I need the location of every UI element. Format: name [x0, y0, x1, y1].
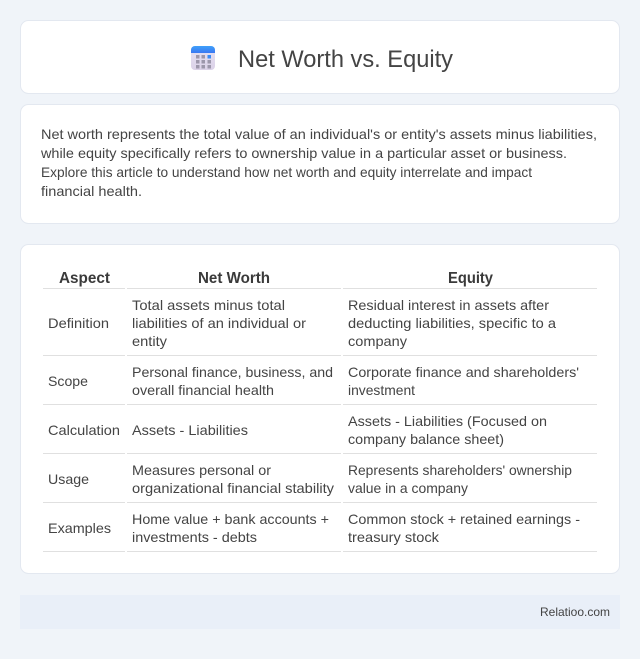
row: calculation: Assets - Liabilities (Focused on	[348, 413, 547, 429]
row: definition: Residual interest in assets after	[348, 297, 549, 313]
row: scope: Corporate finance and shareholders'	[348, 364, 579, 380]
row: examples: treasury stock	[348, 529, 440, 545]
panel: introduction	[20, 104, 620, 224]
row: definition: Definition	[48, 315, 109, 331]
row: usage: Represents shareholders' ownership	[348, 462, 572, 478]
text block: introduction: Net worth represents the total value of an individual's or entity's assets minus liabilities,	[41, 126, 597, 142]
row: scope: overall financial health	[132, 382, 274, 398]
row: usage: value in a company	[348, 480, 468, 496]
row: definition: entity	[132, 333, 167, 349]
row: definition: Total assets minus total	[132, 297, 285, 313]
table header: Equity	[448, 270, 493, 287]
row: examples: Examples	[48, 520, 111, 536]
text block: introduction: while equity specifically refers to ownership value in a particular asset or business.	[40, 145, 567, 161]
row: usage: Usage	[48, 471, 89, 487]
row: usage: Measures personal or	[132, 462, 271, 478]
text block: introduction: Explore this article to understand how net worth and equity interrelate and impact	[41, 164, 532, 180]
panel: comparison table	[20, 244, 620, 574]
text block: introduction	[40, 126, 597, 199]
row: scope	[48, 364, 579, 398]
footer: Relatioo.com	[540, 605, 610, 619]
row: scope: investment	[348, 382, 415, 398]
row: usage: organizational financial stability	[132, 480, 334, 496]
table header: Aspect	[59, 270, 111, 287]
row: calculation: Calculation	[48, 422, 120, 438]
row: calculation: company balance sheet)	[348, 431, 504, 447]
row: scope: Personal finance, business, and	[132, 364, 333, 380]
row: scope: Scope	[48, 373, 88, 389]
row: calculation: Assets - Liabilities	[132, 422, 248, 438]
row: examples: Home value + bank accounts +	[132, 511, 329, 527]
row: definition: liabilities of an individual or	[132, 315, 306, 331]
icon: calendar	[191, 46, 215, 70]
row: definition: company	[348, 333, 407, 349]
row: examples	[48, 511, 580, 545]
title: Net Worth vs. Equity	[238, 46, 453, 73]
row: examples: investments - debts	[132, 529, 257, 545]
table header	[59, 270, 493, 287]
row: examples: Common stock + retained earnings -	[348, 511, 580, 527]
table header: Net Worth	[198, 270, 270, 287]
row: calculation	[48, 413, 547, 447]
text block: introduction: financial health.	[41, 183, 142, 199]
row: definition	[48, 297, 556, 349]
footer	[20, 595, 620, 629]
row: usage	[48, 462, 572, 496]
panel: title card	[20, 20, 620, 94]
row: definition: deducting liabilities, specific to a	[348, 315, 556, 331]
